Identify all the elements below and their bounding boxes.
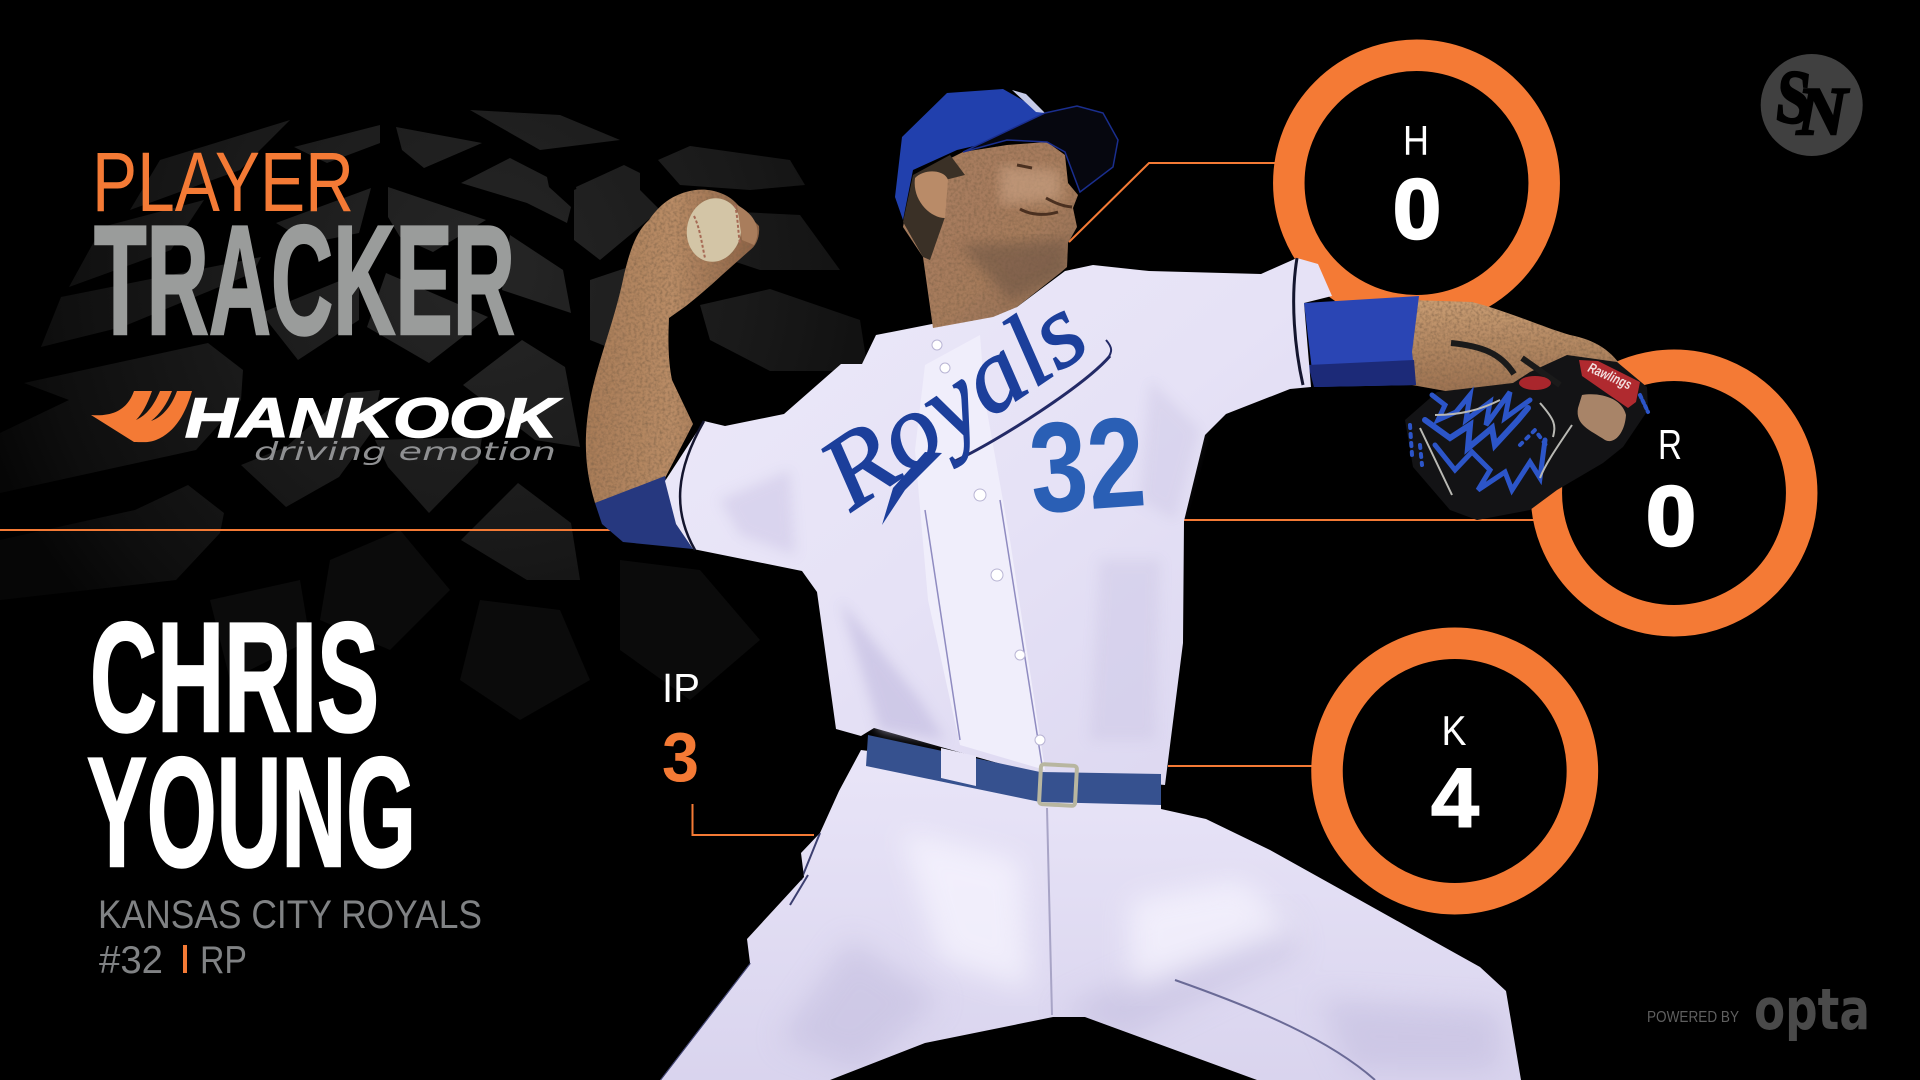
- player name: YOUNG: [87, 726, 416, 900]
- tagline: driving emotion: [254, 437, 556, 466]
- stat ring: strikeouts: [1327, 643, 1582, 899]
- left arm and hand: [586, 190, 759, 503]
- glove brand patch: [1519, 359, 1640, 408]
- glove brand patch: Rawlings: [1586, 359, 1634, 393]
- left undersleeve: [595, 476, 693, 549]
- stat: innings pitched: 3: [662, 718, 699, 796]
- player illustration: [586, 89, 1648, 1080]
- cap: [895, 89, 1045, 220]
- rule: orange divider: [0, 529, 611, 531]
- sponsor logo: hankook: [91, 386, 562, 466]
- sporting news logo: N: [1796, 73, 1850, 149]
- neck and head: [895, 89, 1118, 328]
- hair: [903, 155, 965, 260]
- stat ring: hits: 0: [1393, 162, 1441, 256]
- player name: CHRIS: [90, 591, 379, 765]
- glove stitching: [1420, 400, 1572, 495]
- jersey number: 32: [1025, 390, 1150, 541]
- tire tread background: [0, 110, 868, 720]
- glove webbing laces: [1410, 392, 1648, 490]
- stat ring: strikeouts: K: [1442, 707, 1466, 754]
- team and position: RP: [200, 939, 247, 982]
- facial shading: [960, 240, 1068, 300]
- stat ring: runs: R: [1658, 421, 1682, 468]
- powered by opta: [1647, 977, 1870, 1043]
- right forearm: [1410, 300, 1625, 420]
- title word: tracker: TRACKER: [94, 194, 515, 368]
- icon: hankook wing: [91, 391, 192, 442]
- jersey: [665, 258, 1332, 785]
- connector lines: [692, 163, 1540, 835]
- glove strap: [1451, 343, 1514, 374]
- pants: [660, 750, 1521, 1080]
- stat ring: runs: 0: [1646, 469, 1696, 563]
- sporting news logo: [1761, 54, 1863, 156]
- title: [92, 135, 515, 368]
- stat ring: runs: [1546, 365, 1802, 621]
- team and position: KANSAS CITY ROYALS: [98, 893, 482, 937]
- player name: [87, 591, 416, 900]
- jersey placket: [915, 335, 1045, 770]
- stat ring: hits: H: [1403, 117, 1429, 164]
- right undersleeve: [1304, 296, 1419, 387]
- team and position: #32: [99, 939, 163, 982]
- stat: innings pitched: [662, 665, 700, 796]
- glove hand opening: [1578, 394, 1626, 441]
- jersey shading folds: [720, 380, 1200, 740]
- stat ring: strikeouts: 4: [1431, 751, 1479, 845]
- title word: player: PLAYER: [92, 135, 354, 229]
- jersey script: Royals: [799, 272, 1106, 532]
- cap brim: [963, 106, 1118, 192]
- eye and mouth: [1017, 165, 1072, 214]
- wordmark: HANKOOK: [185, 386, 562, 449]
- jersey buttons: [932, 340, 1045, 745]
- baseball: [681, 193, 747, 267]
- powered by opta: opta: [1754, 977, 1870, 1043]
- stat: innings pitched: IP: [662, 665, 700, 711]
- ear: [915, 171, 948, 218]
- powered by opta: POWERED BY: [1647, 1009, 1739, 1026]
- belt: [866, 735, 1161, 806]
- glove: [1405, 343, 1648, 520]
- team and position: [98, 893, 482, 982]
- sporting news logo: S: [1773, 54, 1815, 141]
- stat ring: hits: [1289, 55, 1544, 311]
